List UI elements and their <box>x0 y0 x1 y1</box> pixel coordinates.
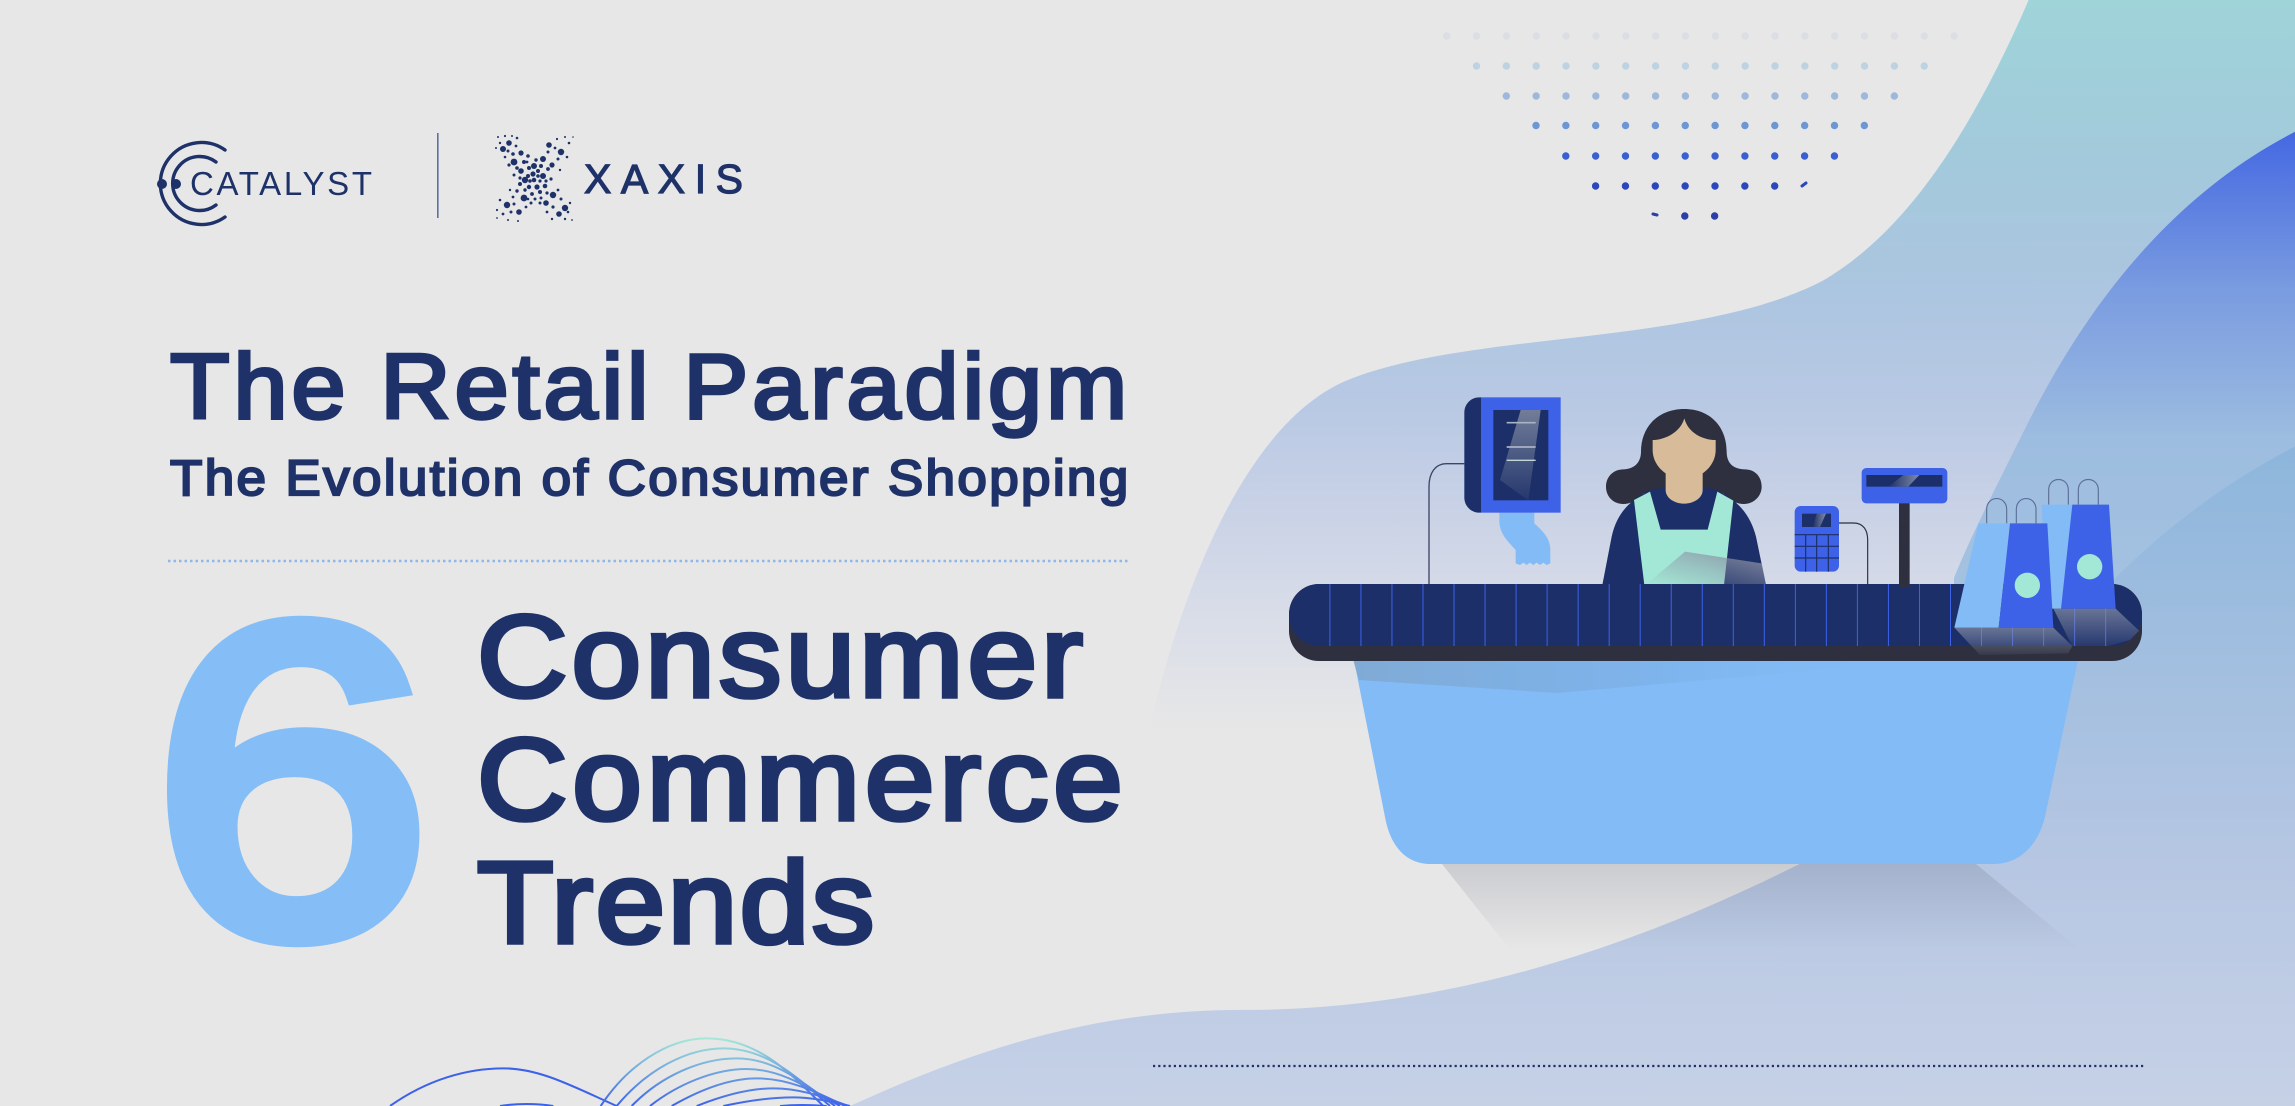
subtitle: The Evolution of Consumer Shopping <box>170 449 1128 506</box>
checkout counter <box>1353 655 2079 864</box>
bottom wave lines <box>390 1038 850 1106</box>
conveyor belt <box>1289 584 2142 661</box>
shopping bags <box>1954 479 2139 655</box>
background blobs <box>849 0 2295 1106</box>
monitor, receipt and cable <box>1429 397 1561 585</box>
logo divider <box>437 133 439 218</box>
cashier figure <box>1602 409 1766 585</box>
heading: 6 Consumer Commerce Trends: Commerce <box>477 715 1123 844</box>
logo: Xaxis: XAXIS <box>584 156 743 202</box>
floor shadow <box>1442 864 2080 975</box>
halftone dot triangle <box>1447 36 1955 216</box>
bottom dotted line <box>1153 1065 2146 1067</box>
big number 6: 6 <box>153 536 430 1027</box>
card reader and display on stand <box>1795 468 1947 588</box>
dotted rule <box>168 560 1128 562</box>
logo: Catalyst: CATALYST <box>190 165 372 202</box>
heading: 6 Consumer Commerce Trends <box>477 592 1123 967</box>
heading: 6 Consumer Commerce Trends: Consumer <box>477 592 1083 721</box>
title: The Retail Paradigm: The Retail Paradigm <box>170 336 1127 438</box>
logo: Xaxis <box>495 135 743 222</box>
logo: Catalyst <box>157 142 372 224</box>
heading: 6 Consumer Commerce Trends: Trends <box>477 838 874 967</box>
